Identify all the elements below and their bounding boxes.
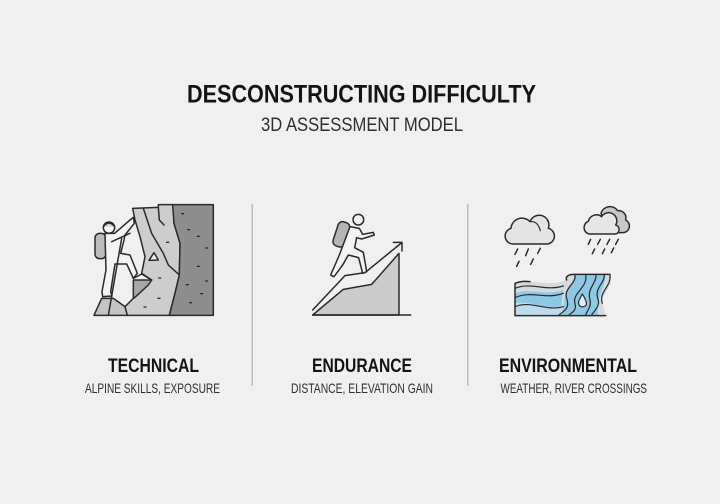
- title: DESCONSTRUCTING DIFFICULTY: [187, 80, 536, 108]
- icon: hiker on ascending slope: [313, 214, 411, 315]
- heading: endurance: ENDURANCE: [312, 356, 412, 377]
- caption: technical: ALPINE SKILLS, EXPOSURE: [85, 380, 220, 396]
- heading: environmental: ENVIRONMENTAL: [499, 356, 637, 377]
- heading: technical: TECHNICAL: [108, 356, 199, 377]
- caption: endurance: DISTANCE, ELEVATION GAIN: [291, 380, 433, 396]
- icon: rock climber: [94, 205, 213, 315]
- caption: environmental: WEATHER, RIVER CROSSINGS: [500, 380, 647, 396]
- icon: rain clouds and river: [505, 207, 629, 316]
- subtitle: 3D ASSESSMENT MODEL: [261, 114, 463, 136]
